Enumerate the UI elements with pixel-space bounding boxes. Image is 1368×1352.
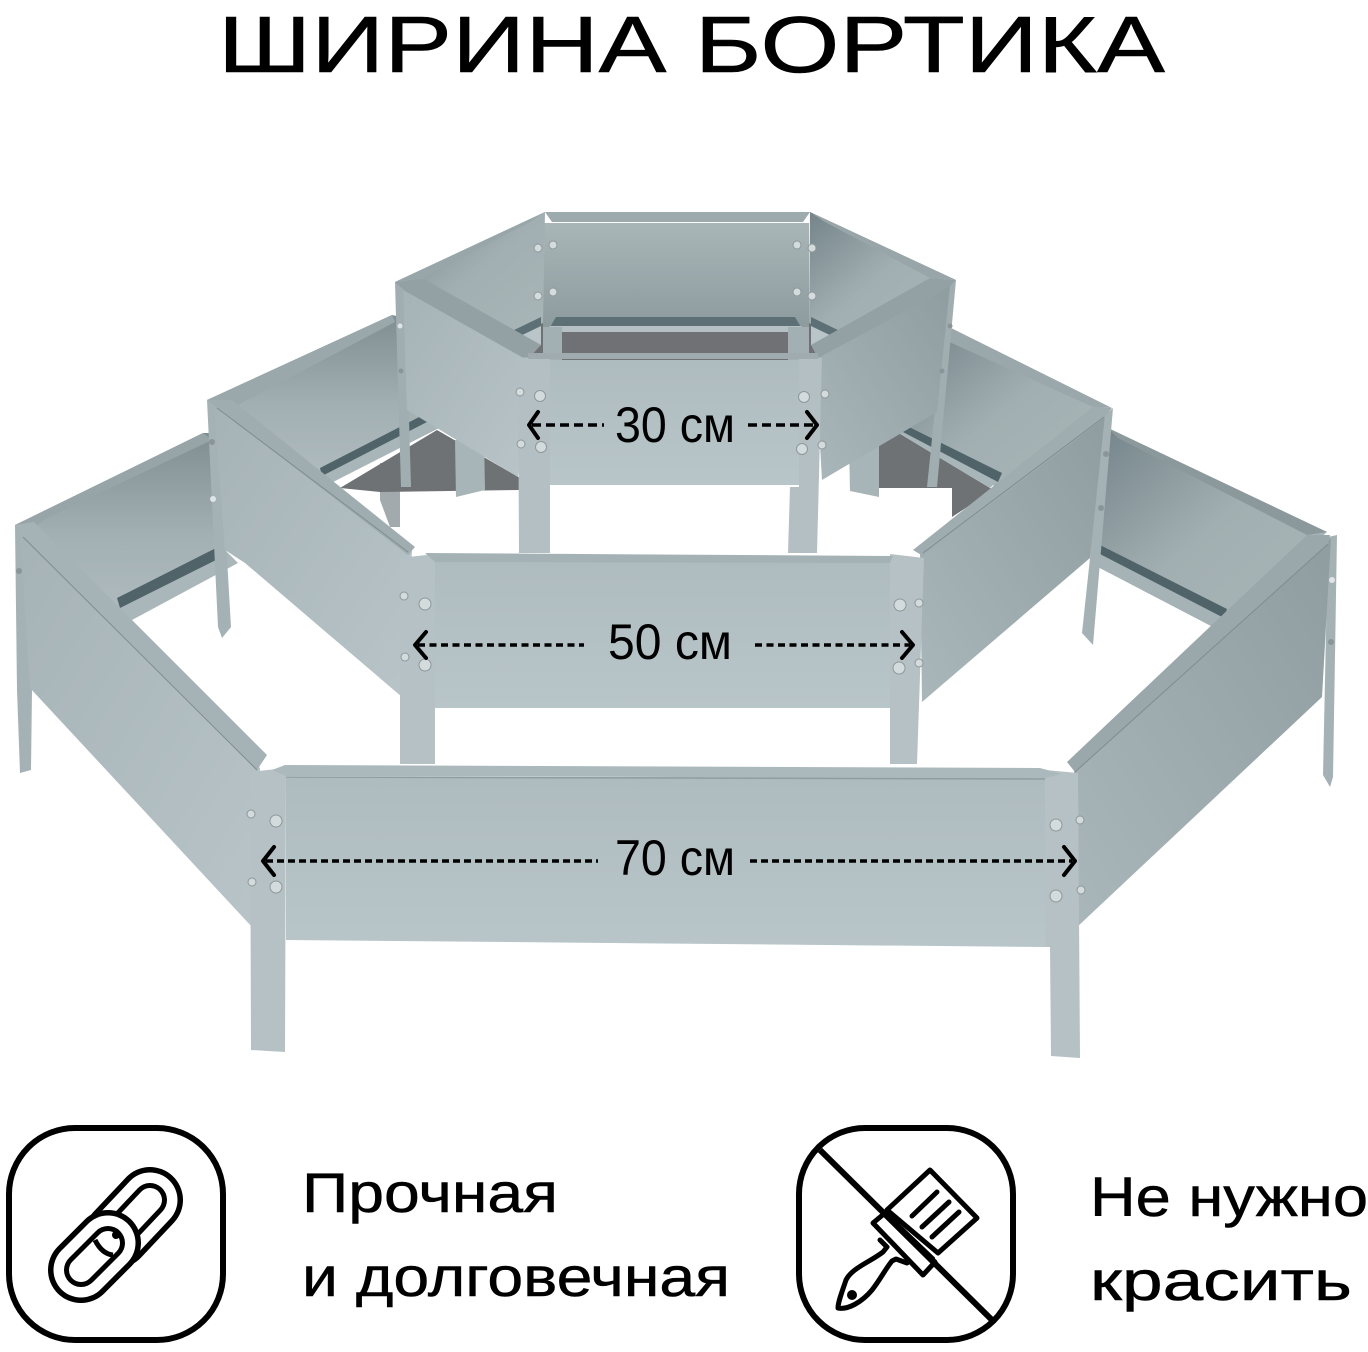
text: durable: Прочная (302, 1161, 558, 1224)
top tier bolts (516, 241, 829, 454)
text: durable: и долговечная (302, 1245, 730, 1308)
bottom tier right panel (1067, 535, 1337, 928)
middle tier back walls and floor shadow (207, 315, 1112, 527)
top tier inner walls (395, 212, 956, 366)
top tier front panel and posts (518, 353, 822, 553)
bottom tier back walls (15, 428, 1327, 627)
title: ШИРИНА БОРТИКА (218, 0, 1166, 89)
bottom tier front panel and posts (250, 765, 1080, 1058)
text: no need to paint: Не нужно (1090, 1165, 1368, 1228)
icon: chain link (9, 1128, 223, 1340)
icon: crossed-out paint brush (799, 1128, 1013, 1340)
text: no need to paint (1090, 1165, 1368, 1312)
measure: 70 cm (263, 830, 1075, 886)
measure: 50 cm: 50 см (608, 614, 732, 670)
middle tier left panel (207, 400, 415, 697)
top tier rear legs (455, 440, 879, 497)
top tier left panel (395, 278, 541, 487)
measure: 30 cm: 30 см (615, 397, 735, 453)
text: no need to paint: красить (1090, 1249, 1352, 1312)
measure: 50 cm (415, 614, 913, 670)
middle tier front panel and posts (400, 553, 924, 764)
text: durable (302, 1161, 730, 1308)
middle tier right panel (913, 407, 1113, 702)
bottom tier left panel (15, 522, 267, 927)
photo: three-tier metal bed (15, 212, 1337, 1058)
bottom tier bolts (247, 810, 1085, 902)
measure: 70 cm: 70 см (615, 830, 735, 886)
top tier right panel (811, 278, 956, 487)
middle tier bolts (400, 592, 923, 674)
measure: 30 cm (529, 397, 817, 453)
